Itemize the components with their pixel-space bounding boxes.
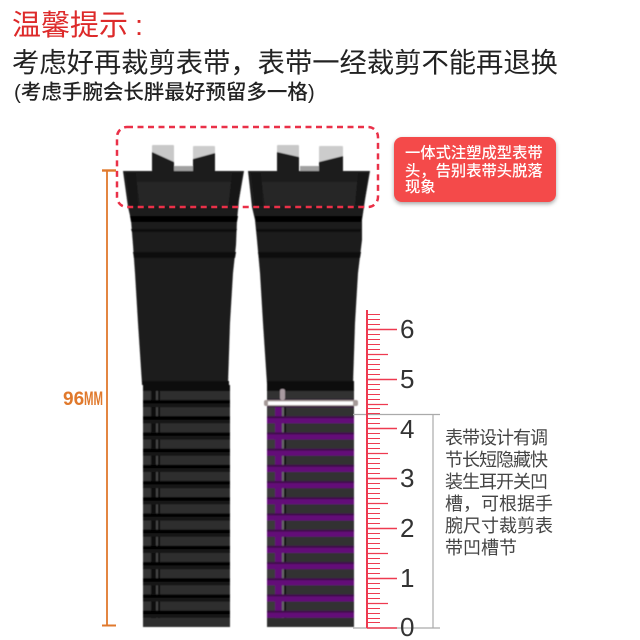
dashed highlight around strap heads	[117, 127, 378, 207]
ruler numbers	[400, 314, 414, 640]
subheading: sizing advice: (考虑手腕会长胖最好预留多一格)	[14, 81, 315, 104]
ruler numbers: 6	[400, 314, 414, 344]
heading: notice: 温馨提示:	[12, 10, 143, 42]
ruler numbers: 1	[400, 563, 414, 593]
ruler numbers: 4	[400, 414, 414, 444]
strap: left black	[123, 145, 244, 627]
description text: 槽，可根据手	[445, 494, 553, 514]
length label 96MM: MM	[84, 389, 103, 410]
ruler numbers: 3	[400, 463, 414, 493]
strap: right with purple grooves	[248, 145, 370, 627]
description text: 腕尺寸裁剪表	[445, 516, 553, 536]
red ruler	[367, 310, 397, 628]
ruler numbers: 2	[400, 513, 414, 543]
length label 96MM	[63, 389, 103, 410]
gray bracket for adjustable section	[353, 414, 440, 628]
description text: 带凹槽节	[445, 538, 517, 558]
callout: one-piece moulded head: 一体式注塑成型表带	[405, 145, 543, 162]
length label 96MM: 96	[63, 389, 84, 410]
heading: warning about cutting: 考虑好再裁剪表带，表带一经裁剪不能再退换	[12, 47, 558, 78]
callout: one-piece moulded head	[394, 137, 556, 202]
description text: 装生耳开关凹	[445, 472, 547, 492]
ruler numbers: 5	[400, 364, 414, 394]
callout: one-piece moulded head: 头，告别表带头脱落	[405, 163, 543, 180]
orange length dimension line	[102, 170, 116, 626]
description text: 表带设计有调	[445, 428, 547, 448]
description text	[445, 428, 553, 558]
callout: one-piece moulded head: 现象	[405, 179, 436, 196]
description text: 节长短隐藏快	[445, 450, 547, 470]
